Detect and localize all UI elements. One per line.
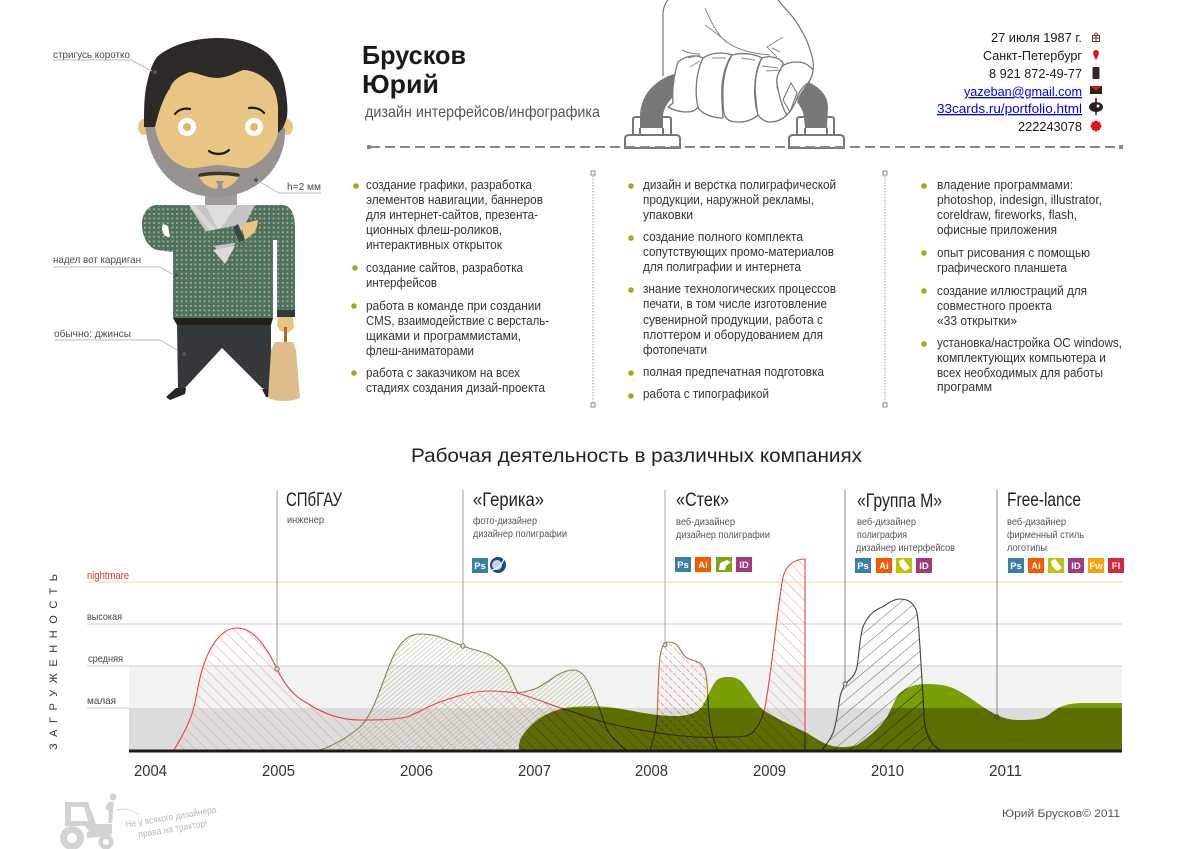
- text lines: работа с типографикой: [643, 387, 769, 401]
- icon: Ai: [876, 558, 892, 573]
- cuff: [233, 224, 245, 242]
- label: beard: [254, 178, 321, 193]
- company: Stek: «Стек»: [676, 490, 729, 511]
- text lines: работа с заказчиком на всех: [366, 366, 521, 380]
- shoe right: [262, 389, 272, 397]
- chin: [198, 173, 240, 189]
- title: name: [362, 40, 466, 99]
- icon: Ps: Ps: [857, 561, 869, 572]
- area: red curve: [174, 559, 805, 750]
- copyright: Юрий Брусков© 2011: [1002, 808, 1120, 820]
- shoe left: [166, 388, 186, 400]
- birth date: 27 июля 1987 г.: [991, 30, 1082, 45]
- text lines: создание графики, разработка: [366, 178, 532, 192]
- text lines: продукции, наружной рекламы,: [643, 193, 814, 207]
- text lines: знание технологических процессов: [643, 282, 836, 296]
- icon: InDesign: ID: [739, 560, 749, 571]
- level label: low: малая: [87, 695, 116, 707]
- text lines: комплектующих компьютера и: [937, 351, 1106, 365]
- company: SPbGAU: [275, 490, 343, 671]
- text lines: упаковки: [643, 208, 693, 222]
- icon: Ps: Ps: [1010, 561, 1022, 572]
- portfolio: 33cards.ru/portfolio.html: [937, 101, 1082, 116]
- icon: Ps: Ps: [677, 560, 689, 571]
- company: Group M: дизайнер интерфейсов: [856, 542, 955, 554]
- icon: Ai: Ai: [879, 561, 889, 572]
- bag handle: [284, 327, 287, 343]
- icon: mail: [1090, 86, 1102, 94]
- icon: phone: [1092, 67, 1100, 79]
- icon: CorelDraw: [716, 557, 732, 572]
- skills column 2: [628, 178, 836, 401]
- ear left: [138, 119, 150, 135]
- company: SPbGAU: СПбГАУ: [286, 490, 343, 511]
- year labels: 2007: [518, 763, 551, 780]
- label: hair: стригусь коротко: [53, 49, 130, 61]
- text lines: создание иллюстраций для: [937, 284, 1087, 298]
- arm gap: [162, 224, 170, 237]
- band: medium: [129, 666, 1122, 708]
- text lines: опыт рисования с помощью: [937, 246, 1090, 260]
- text lines: [643, 178, 836, 401]
- raised arm: [142, 205, 240, 252]
- sweater torso: [173, 205, 295, 318]
- lower hand: [277, 317, 294, 333]
- tractor caption: Не у всякого дизайнера: [125, 804, 218, 831]
- text lines: создание полного комплекта: [643, 230, 803, 244]
- shirt inner: [205, 205, 237, 231]
- company: Gerika: [461, 490, 567, 648]
- phone: 8 921 872-49-77: [989, 66, 1082, 81]
- divider: column 2-3: [883, 171, 887, 407]
- text lines: графического планшета: [937, 261, 1067, 275]
- icon: tractor: [60, 794, 116, 849]
- icon: InDesign: [916, 558, 932, 573]
- level label: medium: средняя: [88, 653, 123, 665]
- year labels: 2006: [400, 763, 433, 780]
- icon: gift: [1092, 33, 1100, 42]
- heading: work history: Рабочая деятельность в различных компаниях: [411, 446, 863, 467]
- text lines: дизайн и верстка полиграфической: [643, 178, 836, 192]
- text lines: программ: [937, 380, 992, 394]
- hair: [144, 38, 287, 133]
- skills column 3: [921, 178, 1122, 394]
- hand on chest: [241, 220, 258, 240]
- text lines: [366, 178, 549, 395]
- collar highlight: [189, 205, 218, 236]
- year labels: 2011: [989, 763, 1022, 780]
- icon: Ps: [855, 558, 871, 573]
- year labels: [134, 763, 1022, 780]
- level label: nightmare: nightmare: [87, 570, 129, 582]
- text lines: плоттером и оборудованием для: [643, 328, 823, 342]
- text lines: полная предпечатная подготовка: [643, 365, 824, 379]
- icon: InDesign: ID: [919, 561, 929, 572]
- company: Group M: «Группа М»: [857, 491, 942, 512]
- title: name: Юрий: [362, 69, 439, 99]
- hand outline: [663, 0, 813, 100]
- handle right: [789, 82, 844, 148]
- text lines: ционных флеш-роликов,: [366, 223, 502, 237]
- tractor callout line: [116, 809, 139, 815]
- area: black Group M: [822, 599, 940, 750]
- company: Gerika: «Герика»: [473, 490, 544, 511]
- text lines: стадиях создания дизай-проекта: [366, 381, 545, 395]
- icon: fist on handles: [625, 0, 844, 148]
- text lines: сопутствующих промо-материалов: [643, 245, 834, 259]
- hand back: [663, 0, 813, 113]
- icon: Flash: Fl: [1112, 561, 1120, 572]
- text lines: [937, 178, 1122, 394]
- band: low: [129, 708, 1122, 750]
- text lines: офисные приложения: [937, 223, 1057, 237]
- company: Free-lance: веб-дизайнер: [1007, 516, 1066, 528]
- company: Group M: [843, 490, 955, 686]
- text lines: создание сайтов, разработка: [366, 261, 523, 275]
- text lines: для интернет-сайтов, презента-: [366, 208, 538, 222]
- finger 4: [755, 57, 787, 122]
- icon: Ai: [695, 557, 711, 572]
- eyebrows: [175, 108, 264, 114]
- tractor caption: права на трактор!: [137, 818, 208, 841]
- handle left: [625, 74, 680, 148]
- label: jeans: обычно: джинсы: [54, 328, 131, 340]
- email: yazeban@gmail.com: [964, 84, 1082, 99]
- lower triangle of shirt: [213, 246, 235, 264]
- contact block: [937, 30, 1103, 134]
- icon: InDesign: [736, 557, 752, 572]
- soul patch: [215, 181, 224, 190]
- icq: 222243078: [1018, 119, 1082, 134]
- character illustration: [138, 38, 300, 401]
- icon: flower: [1090, 120, 1102, 132]
- company: Stek: веб-дизайнер: [676, 516, 735, 528]
- nose smile: [209, 150, 229, 154]
- bullets: [921, 183, 927, 347]
- beard: [145, 100, 285, 197]
- level label: high: высокая: [87, 611, 122, 623]
- area: olive Gerika: [320, 634, 627, 750]
- text lines: для полиграфии и интернета: [643, 260, 801, 274]
- text lines: работа в команде при создании: [366, 299, 541, 313]
- title: name: Брусков: [362, 40, 466, 70]
- collar outer: [189, 205, 255, 263]
- eye right: [245, 118, 263, 136]
- hem: [173, 318, 273, 325]
- text lines: флеш-аниматорами: [366, 344, 474, 358]
- label: cardigan: [53, 254, 178, 277]
- ear right: [281, 119, 293, 135]
- text lines: всех необходимых для работы: [937, 366, 1103, 380]
- label: jeans: [54, 328, 186, 356]
- year labels: 2005: [262, 763, 295, 780]
- area: freelance and main green: [515, 677, 1125, 752]
- skills column 1: [351, 178, 549, 395]
- company: Gerika: фото-дизайнер: [473, 515, 537, 527]
- icon: Ai: Ai: [698, 560, 708, 571]
- hand creases: [682, 8, 783, 71]
- icon: Flash: [1108, 558, 1124, 573]
- text lines: элементов навигации, баннеров: [366, 193, 543, 207]
- pants: [177, 325, 271, 391]
- label: cardigan: надел вот кардиган: [53, 254, 141, 266]
- text lines: photoshop, indesign, illustrator,: [937, 193, 1102, 207]
- year labels: 2009: [753, 763, 786, 780]
- year labels: 2010: [871, 763, 904, 780]
- year labels: 2008: [635, 763, 668, 780]
- company: Free-lance: [995, 490, 1124, 719]
- text lines: печати, в том числе изготовление: [643, 297, 827, 311]
- subtitle: дизайн интерфейсов/инфографика: [365, 104, 600, 121]
- text lines: coreldraw, fireworks, flash,: [937, 208, 1077, 222]
- thumb: [777, 62, 813, 115]
- city: Санкт-Петербург: [983, 48, 1082, 63]
- year labels: 2004: [134, 763, 167, 780]
- company: Free-lance: фирменный стиль: [1007, 529, 1084, 541]
- text lines: фотопечати: [643, 343, 707, 357]
- company: Group M: полиграфия: [857, 529, 907, 541]
- level lines: [87, 582, 1122, 708]
- company: Free-lance: Free-lance: [1007, 490, 1081, 511]
- mouth: [200, 174, 238, 175]
- lower cuff: [277, 310, 295, 317]
- company: Free-lance: логотипы: [1007, 543, 1047, 554]
- text lines: установка/настройка ОС windows,: [937, 336, 1122, 350]
- icon: pin: [1093, 50, 1099, 60]
- icon: Ai: Ai: [1031, 561, 1041, 572]
- finger 2: [696, 53, 732, 118]
- company: Stek: дизайнер полиграфии: [676, 529, 770, 541]
- label: beard: h=2 мм: [287, 181, 321, 193]
- finger 3: [723, 54, 762, 122]
- face: [155, 70, 278, 168]
- chart: workload timeline: [87, 559, 1125, 780]
- icon: Ps: [1008, 558, 1024, 573]
- divider: column 1-2: [591, 171, 595, 407]
- bullets: [351, 183, 359, 376]
- company: Group M: веб-дизайнер: [857, 516, 916, 528]
- bag: [268, 342, 300, 401]
- axis label: load: ЗАГРУЖЕННОСТЬ: [48, 574, 60, 750]
- text lines: интерактивных открыток: [366, 238, 502, 252]
- eye left: [178, 118, 196, 136]
- company: Stek: [663, 490, 770, 647]
- icon: Ps: [472, 558, 488, 573]
- icon: Ps: [675, 557, 691, 572]
- label: hair: [53, 49, 157, 74]
- baseline: [129, 750, 1122, 752]
- icon: Fireworks: [1088, 558, 1104, 573]
- text lines: владение программами:: [937, 178, 1073, 192]
- thumbnail: [783, 83, 797, 112]
- icon: CorelDraw: [1048, 558, 1064, 573]
- icon: mascot: [1089, 98, 1103, 115]
- area: orange Stek: [650, 642, 718, 750]
- tractor caption: [125, 804, 220, 842]
- company: Gerika: дизайнер полиграфии: [473, 528, 567, 540]
- icon: InDesign: [1068, 558, 1084, 573]
- text lines: совместного проекта: [937, 299, 1052, 313]
- neck: [205, 190, 237, 210]
- icon: CorelDraw: [896, 558, 912, 573]
- company: SPbGAU: инженер: [287, 515, 324, 526]
- dark overlaps inside green: [519, 684, 940, 750]
- bullets: [628, 183, 634, 399]
- divider: header dashed line: [367, 145, 1123, 149]
- text lines: сувенирной продукции, работа с: [643, 313, 823, 327]
- text lines: CMS, взаимодействие с версталь-: [366, 314, 549, 328]
- icon: Ai: [1028, 558, 1044, 573]
- text lines: интерфейсов: [366, 276, 437, 290]
- icon: Fireworks: Fw: [1089, 561, 1103, 572]
- text lines: «33 открытки»: [937, 314, 1017, 328]
- icon: InDesign: ID: [1071, 561, 1081, 572]
- finger 1: [668, 56, 703, 112]
- icon: Ps: Ps: [474, 561, 486, 572]
- icon: swirl: [490, 557, 506, 573]
- text lines: щиками и программистами,: [366, 329, 521, 343]
